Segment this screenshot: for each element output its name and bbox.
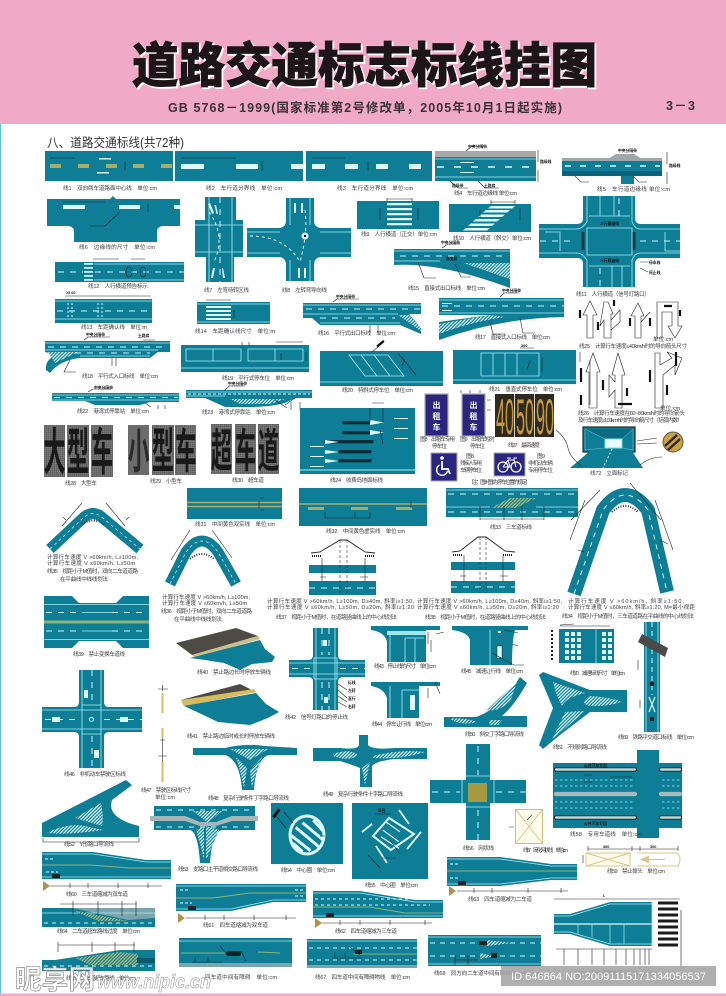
panel: line 7: 线7 左弯待转区线 (204, 286, 249, 294)
page number: 3－3 (666, 99, 695, 113)
panel: line 54 (271, 803, 343, 874)
panel: line 48 (193, 745, 297, 802)
panel: line 24 (300, 403, 415, 484)
sign: taxi 1: 出 (432, 400, 440, 410)
panel: line 34: 计算行车速度 V >60km/h, 斜率≥1:50, (568, 597, 684, 605)
panel: line 15: 线15 直接式出口标线 单位:cm (408, 284, 485, 292)
sign: wheelchair (431, 452, 482, 481)
panel: line 16: 线16 平行式出口标线 单位:cm (318, 329, 395, 337)
subtitle: GB 5768－1999(国家标准第2号修改单，2005年10月1日起实施) (168, 100, 562, 115)
panel: line 59 (583, 845, 680, 875)
road text: line 30: 线30 超车道 (232, 476, 264, 484)
panel: line 62: 线62 四车道缩减为三车道 (335, 927, 397, 935)
panel: line 3 (306, 151, 432, 192)
title: 道路交通标志标线挂图 (132, 40, 597, 93)
panel: line 64: 线64 二车道超车路线过度 单位:cm (57, 927, 140, 935)
panel: line 52 (42, 780, 139, 848)
panel: line 15 (394, 240, 510, 292)
sign: taxi 2: 出 (470, 400, 478, 410)
panel: line 71: 线71 机动车道缩减过渡渐变段 单位:cm (575, 969, 657, 977)
panel: line 36: 线36 视距小于M值时，双向二车道道路 (161, 607, 252, 615)
sign: taxi 1: 图8 出租车专用 (420, 435, 455, 443)
panel: line 42: 标线 (348, 680, 356, 685)
panel: line 2: 线2 车行道分界线 单位:cm (206, 184, 282, 192)
road text: line 29 (128, 424, 196, 485)
road text: line 28: 型 (67, 426, 89, 482)
panel: line 58: 线58 专用车道线 单位:cm (570, 830, 642, 838)
panel: line 21: 300 (521, 344, 527, 348)
sign: wheelchair: 残疾人专用 (460, 459, 482, 467)
panel: line 16 (303, 294, 421, 337)
panel: line 5: 路缘线 (669, 163, 681, 168)
panel: line 11: 停车线 (649, 260, 661, 265)
arrows: line 26 (578, 352, 685, 424)
panel: line 18 (45, 332, 170, 380)
panel: line 55: 半径 (378, 808, 386, 813)
panel: line 10 (449, 200, 531, 242)
panel: line 17: 中央分隔带 (502, 288, 521, 293)
arrows: line 26: 线26 计算行车速度在60~80km/h时的导向箭头 (578, 409, 685, 417)
panel: line 22: 中央分隔带 (94, 385, 113, 390)
road text: line 28: 大 (44, 426, 66, 482)
panel: line 67 (307, 939, 417, 981)
road text: line 30: 超 (211, 426, 232, 477)
arrows: line 25: 线25 计算行车速度≤40km/h时的导向箭头尺寸 (579, 342, 687, 350)
text: 90 (536, 389, 554, 445)
panel: line 42: 左转 (348, 688, 356, 693)
panel: line 51: 线51 不规则路口导流线 (553, 743, 607, 751)
panel: line 5: 线5 车行道边缘线 单位:cm (597, 185, 670, 193)
watermark: image id (501, 966, 716, 986)
panel: line 55 (352, 803, 428, 889)
panel: line 37: 计算行车速度 V >60km/h, L≥100m, D≥40m, 斜率i≥1:50, (267, 597, 414, 605)
sign: taxi 1: 租 (432, 411, 440, 421)
panel: line 38 (417, 537, 562, 621)
panel: line 63: 线63 四车道缩减为二车道 (468, 895, 532, 903)
panel: line 58: 公共汽车专用 (584, 821, 607, 826)
panel: line 47: 线47 禁驶区标线尺寸 (141, 786, 191, 794)
panel: line 38: 计算行车速度 V >60km/h, L≥100m, D≥40m, 斜率i≥1:50, (417, 597, 562, 605)
arrows: line 25: 单位:cm (653, 335, 674, 343)
panel: line 35: 在平曲线中线线划法 (60, 575, 108, 583)
panel: line 6: 线6 边缘线的尺寸 单位:cm (79, 243, 155, 251)
arrows: line 25 (579, 300, 687, 350)
panel: line 42 (285, 628, 365, 721)
sign: bicycle: 图9 (537, 452, 545, 460)
panel: line 13: 25 60 (66, 291, 76, 295)
road text: line 28: 线28 大型车 (65, 479, 97, 487)
road text: line 29: 线29 小型车 (150, 477, 182, 485)
panel: line 40 (176, 628, 275, 676)
panel: line 10: 线10 人行横道（斜交）单位:cm (453, 234, 531, 242)
watermark: nipic (15, 965, 211, 995)
title: 道路交通标志标线挂图 (134, 42, 598, 94)
panel: line 9: 线9 人行横道（正交）单位:cm (361, 230, 437, 238)
arrows: line 26: 及行车速度≥100km/h时的导向箭尺寸（括弧内数） (578, 416, 683, 424)
panel: line 67: 线67 四车道中间有障碍物线 单位:cm (315, 973, 410, 981)
panel: line 65 (42, 942, 155, 982)
panel: line 31: 线31 中间黄色双实线 单位:cm (195, 520, 275, 528)
panel: line 4: 路缘带 (452, 183, 464, 188)
panel: line 35: 计算行车速度 V >60km/h, L≥100m, (47, 553, 138, 561)
panel: line 18: 中央分隔带 (86, 332, 105, 337)
panel: line 34: 线34 视距小于M值时，三车道道路在平曲线的中心线划法 (562, 612, 694, 620)
panel: line 41: 线41 禁止路边临时或长时停放车辆线 (187, 732, 275, 740)
panel: line 42: 线42 信号灯路口的停止线 (285, 713, 348, 721)
panel: line 4: 中央分隔带 (468, 144, 487, 149)
panel: line 14 (195, 300, 275, 335)
panel: line 21: 线21 垂直式停车位 单位:cm (489, 385, 562, 393)
panel: line 42: 直行 (348, 696, 356, 701)
road text: line 30: 车 (235, 426, 256, 477)
panel: line 68: 线68 同方向二车道中间有障碍物 单位:cm (434, 969, 541, 977)
panel: line 39: 线39 禁止变换车道线 (73, 650, 125, 658)
panel: line 47: 单位:cm (155, 793, 175, 801)
section heading: 八、道路交通标线(共72种) (47, 135, 184, 150)
panel: line 62 (313, 891, 443, 935)
panel: line 38: 线38 视距小于M值时，在道路竖曲线上的中心线划法 (425, 613, 546, 621)
panel: line 17: 线17 直接式入口标线 单位:cm (475, 333, 550, 341)
panel: line 13 (55, 291, 152, 331)
panel: line 43: 线43 停止线的尺寸 单位:cm (374, 662, 436, 670)
panel: line 4: 路缘线 (540, 159, 552, 164)
panel: line 23: 中央分隔带 (228, 381, 247, 386)
panel: line 16: 中央分隔带 (336, 294, 355, 299)
panel: line 58 (553, 750, 682, 838)
panel: line 11: 人行横道线 (600, 258, 619, 263)
watermark: image id: ID:646864 NO:20091115171334056537 (511, 971, 706, 983)
panel: line 6 (47, 196, 180, 251)
panel: line 9 (357, 198, 439, 238)
panel: line 31 (187, 488, 282, 528)
sign: bicycle (494, 452, 553, 476)
panel: line 60: 线60 三车道缩减为双车道 (66, 890, 128, 898)
sign: taxi 1: 停车位 (432, 442, 447, 450)
note: （注：图8~图9为停车位置的规定） (468, 478, 531, 486)
panel: line 8: 线8 左转弯导向线 (282, 286, 327, 294)
panel: line 59: 线59 禁止掉头 单位:cm (607, 867, 665, 875)
sign: bicycle: 专用停车位 (528, 466, 553, 474)
panel: line 49 (313, 735, 427, 798)
panel: line 59: 300 (650, 845, 656, 849)
panel: line 15: 渐变段 (446, 256, 458, 261)
panel: line 36 (161, 530, 252, 623)
panel: line 72 tunnel marking (556, 427, 683, 477)
panel: line 32: 线32 中间黄色虚实线 单位:cm (326, 527, 405, 535)
panel: line 20: 线20 特斜式停车位 单位:cm (342, 386, 413, 394)
panel: line 11 (539, 196, 680, 298)
panel: line 12 (55, 259, 184, 290)
panel: line 44: 线44 停车让行线 单位:cm (372, 720, 432, 728)
panel: line 5 (562, 148, 681, 193)
panel: line 24: 线24 收费岛地面标线 (330, 476, 383, 484)
panel: line 23 (186, 381, 312, 416)
panel: line 47 (141, 685, 191, 801)
panel: line 27 speed limits: 线27 最高速度 (508, 441, 540, 449)
panel: line 61: 线61 四车道缩减为双车道 (203, 921, 268, 929)
panel: line 15: 中央分隔带 (441, 240, 460, 245)
road text: line 29: 小 (128, 426, 150, 478)
watermark: nipic: www.nipic.cn (97, 972, 211, 993)
sign: bicycle: 非机动车辆 (528, 459, 553, 467)
road text: line 28 (44, 425, 113, 487)
panel: line 69 (618, 622, 694, 741)
panel: line 45 (452, 626, 528, 675)
panel: line 34 (562, 483, 695, 620)
panel: line 45: 线45 减速让行线 单位:cm (461, 667, 523, 675)
panel: line 69: 线69 铁路平交道口标线 单位:cm (618, 733, 694, 741)
panel: line 14: 线14 车距确认线尺寸 单位:m (195, 327, 275, 335)
sign: taxi 1: 车 (432, 422, 440, 432)
panel: line 37 (267, 540, 414, 621)
road text: line 29: 型 (152, 424, 174, 478)
sign: taxi 1 (420, 394, 455, 450)
panel: line 55: 线55 中心圈 单位:cm (365, 881, 418, 889)
panel: line 37: 线37 视距小于M值时，在道路竖曲线上的中心线划法 (276, 613, 397, 621)
panel: line 7 (195, 197, 249, 294)
panel: line 53: 线53 支路口主干道相交路口导流线 (178, 865, 258, 873)
panel: line 71: L (603, 894, 606, 898)
panel: line 32 (299, 488, 427, 535)
panel: line 35: 计算行车速度 V ≤60km/h, L≥50m (47, 559, 135, 567)
panel: line 1: 线1 双向两车道路面中心线 单位:cm (63, 184, 157, 192)
sign: taxi 2: 图9 出租车短时 (460, 435, 495, 443)
panel: line 22: 线22 港湾式停靠站 单位:cm (77, 407, 149, 415)
road text: line 28: 车 (91, 426, 113, 482)
panel: line 60 (42, 852, 171, 898)
panel: line 38: 计算行车速度 V ≤60km/h, L≥50m, D≥20m, 斜率i≥1:20 (417, 603, 559, 611)
panel: line 54: 线54 中心圈 单位:cm (281, 866, 335, 874)
panel: line 23: 线23 港湾式停靠站 单位:cm (202, 408, 275, 416)
panel: line 8 (247, 198, 351, 294)
panel: line 33: 线33 三车道标线 (490, 523, 532, 531)
panel: line 66 (179, 938, 292, 981)
panel: line 48: 线48 复杂行驶条件丁字路口导流线 (208, 794, 289, 802)
panel: line 57: 线57 简化网状线 单位:cm (523, 846, 568, 854)
panel: line 1 (45, 151, 173, 192)
panel: line 50: 线50 斜交丁字路口导流线 (465, 730, 524, 738)
sign: wheelchair: 车辆停车位 (460, 466, 482, 474)
panel: line 33 (446, 488, 578, 531)
panel: line 58: 公共汽车专用 (584, 763, 607, 768)
panel: line 35 (47, 503, 140, 583)
panel: line 44 (371, 682, 440, 728)
panel: line 39 (44, 596, 149, 658)
panel: line 70: 线70 减速标线尺寸 单位:cm (570, 669, 625, 677)
panel: line 11: 人行横道线 (600, 221, 619, 226)
sign: taxi 2: 车 (470, 422, 478, 432)
panel: line 4: 土路肩 (484, 183, 496, 188)
panel: line 52: 线52 Y形路口导流线 (64, 840, 114, 848)
panel: line 43 (371, 626, 444, 670)
sign: taxi 2: 停车位 (470, 442, 485, 450)
panel: line 42: 右转 (348, 704, 356, 709)
sign: wheelchair: 图8 (466, 452, 474, 460)
panel: line 2 (175, 151, 303, 192)
panel: line 68 (428, 935, 541, 977)
panel: line 53 (150, 806, 258, 873)
panel: line 71 (554, 894, 681, 977)
panel: line 27 speed limits: 40 (496, 389, 514, 445)
panel: line 20 (320, 340, 443, 394)
panel: line 56 (430, 744, 526, 852)
road text: line 30: 道 (258, 426, 279, 477)
sign: taxi 2 (460, 390, 495, 450)
panel: line 19: 线19 平行式停车位 单位:cm (222, 374, 294, 382)
panel: line 22 (52, 385, 179, 415)
panel: line 13: 线13 车距确认线 单位:m (81, 323, 147, 331)
panel: line 35: 线35 视距小于M值时，双向二车道道路 (47, 567, 138, 575)
panel: line 4: 线4 车行道边缘线 单位:cm (454, 189, 517, 197)
panel: line 18: 土路肩 (138, 333, 150, 338)
panel: line 46: 线46 非机动车禁驶区标线 (64, 770, 126, 778)
panel: line 72 tunnel marking: 线72 立面标记 (590, 469, 628, 477)
panel: line 21 (453, 344, 576, 393)
panel: line 66: 四车道中间有障碍 单位:cm (205, 973, 277, 981)
panel: line 59: 300 (603, 845, 609, 849)
panel: line 27 speed limits: 50 (516, 389, 534, 445)
panel: line 34: 计算行车速度 V ≤60km/h, 斜率≥1:20, M=最小视距 (568, 603, 695, 611)
panel: line 46 (42, 670, 142, 778)
panel: line 41 (181, 684, 279, 740)
panel: line 64 (42, 901, 155, 935)
panel: line 40: 线40 禁止路边长时停放车辆线 (197, 668, 271, 676)
panel: line 36: 计算行车速度 V ≤60km/h, L≥50m (162, 599, 247, 607)
panel: line 37: 计算行车速度 V ≤60km/h, L≥50m, D≥20m, 斜率i≥1:20 (267, 603, 414, 611)
panel: line 11: 停止线 (649, 270, 661, 275)
panel: line 50 (444, 677, 527, 738)
panel: line 65: 线65 二车道超车路线 单位:cm (66, 974, 136, 982)
road text: line 29: 车 (175, 426, 196, 478)
panel: line 12: 线12 人行横道预告标示 (88, 282, 148, 290)
panel: line 63 (447, 857, 577, 903)
panel: line 36: 计算行车速度 V >60km/h, L≥100m, (162, 593, 250, 601)
panel: line 11: 线11 人行横道（信号灯路口） (576, 290, 650, 298)
panel: line 36: 在平曲线中线线划法 (174, 615, 222, 623)
panel: line 17 (439, 288, 564, 341)
panel: line 49: 线49 复杂行驶条件十字路口导流线 (323, 790, 403, 798)
panel: line 4 (435, 144, 552, 197)
arrows: line 26: 单位:cm (660, 404, 681, 412)
panel: line 3: 线3 车行道分界线 单位:cm (337, 184, 413, 192)
panel: line 19 (181, 342, 309, 382)
panel: line 5: 中央分隔带 (618, 148, 637, 153)
watermark: nipic: 昵享网 (15, 965, 95, 995)
sign: taxi 2: 租 (470, 411, 478, 421)
panel: line 56: 线56 网状线 (463, 844, 494, 852)
road text: line 30 (211, 424, 279, 484)
panel: line 57 (509, 810, 568, 854)
panel: line 61 (176, 884, 306, 929)
panel: line 70 (552, 624, 625, 677)
panel: line 51 (539, 672, 627, 751)
panel: line 18: 线18 平行式入口标线 单位:cm (82, 372, 158, 380)
